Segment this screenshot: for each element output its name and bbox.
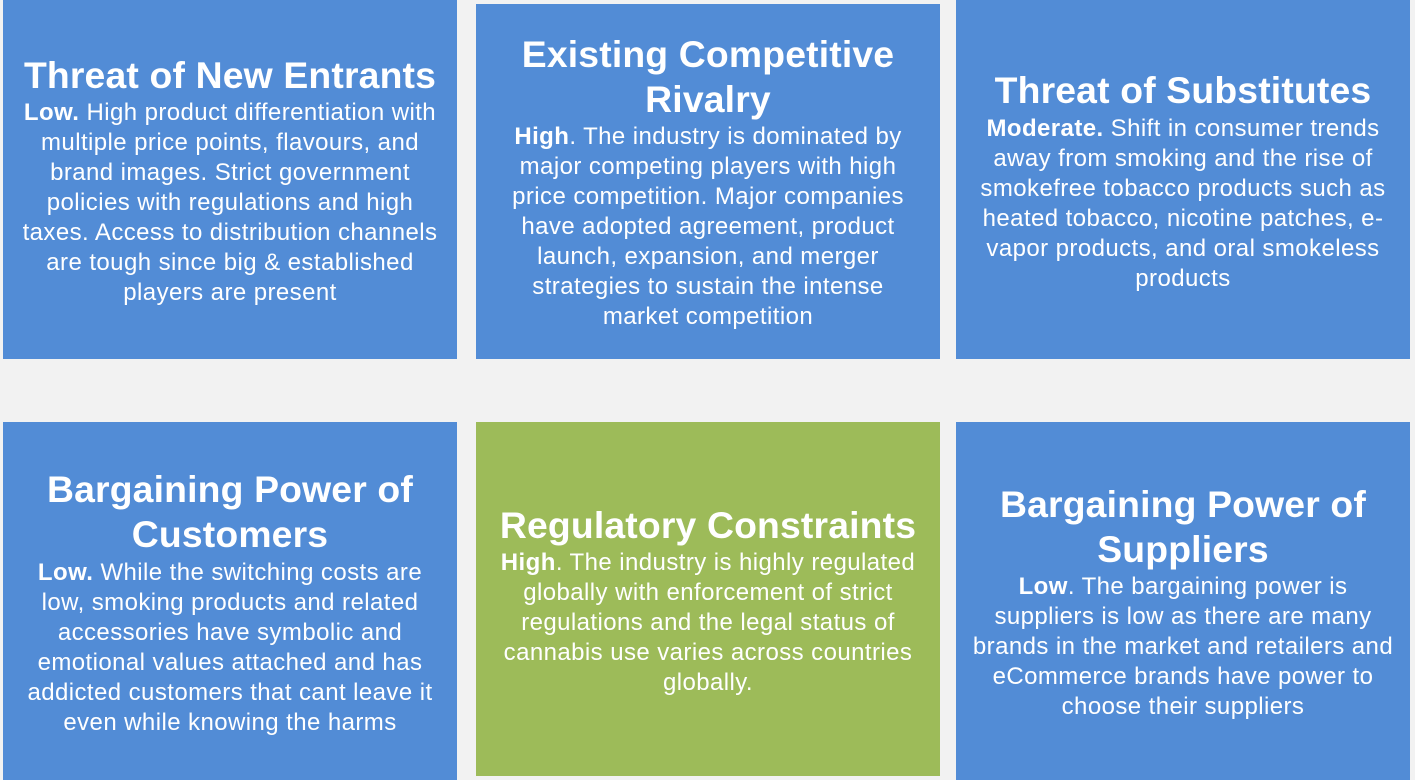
- text block: threat of substitutes: [980, 115, 1386, 292]
- text block: existing competitive rivalry: launch, expansion, and merger: [537, 243, 879, 270]
- heading: bargaining power of suppliers: Bargaining Power of: [1000, 483, 1366, 525]
- panel: regulatory constraints: [476, 422, 940, 776]
- text block: regulatory constraints: globally with enforcement of strict: [523, 579, 893, 606]
- panel: bargaining power of customers: [3, 422, 457, 780]
- text block: existing competitive rivalry: major competing players with high: [520, 153, 896, 180]
- heading: bargaining power of suppliers: [1000, 483, 1366, 570]
- text block: threat of substitutes: vapor products, and oral smokeless: [986, 235, 1380, 262]
- text block: threat of substitutes: heated tobacco, nicotine patches, e-: [983, 205, 1383, 232]
- text block: bargaining power of customers: low, smoking products and related: [42, 589, 418, 616]
- heading: threat of new entrants: Threat of New Entrants: [24, 54, 436, 96]
- heading: existing competitive rivalry: Existing Competitive: [522, 33, 894, 75]
- text block: existing competitive rivalry: price competition. Major companies: [512, 183, 904, 210]
- text block: threat of substitutes: products: [1135, 265, 1231, 292]
- panel: existing competitive rivalry: [476, 4, 940, 359]
- text block: bargaining power of suppliers: Low. The bargaining power is: [1019, 573, 1347, 600]
- text block: regulatory constraints: cannabis use varies across countries: [504, 639, 912, 666]
- text block: bargaining power of suppliers: suppliers is low as there are many: [994, 603, 1372, 630]
- text block: existing competitive rivalry: High. The industry is dominated by: [514, 123, 902, 150]
- text block: existing competitive rivalry: strategies to sustain the intense: [532, 273, 884, 300]
- text block: bargaining power of customers: even while knowing the harms: [63, 709, 397, 736]
- text block: threat of new entrants: Low. High product differentiation with: [24, 99, 436, 126]
- text block: threat of substitutes: Moderate. Shift in consumer trends: [986, 115, 1380, 142]
- text block: threat of new entrants: brand images. Strict government: [50, 159, 410, 186]
- heading: regulatory constraints: Regulatory Constraints: [500, 504, 916, 546]
- text block: existing competitive rivalry: market competition: [603, 303, 813, 330]
- panel: threat of new entrants: [3, 0, 457, 359]
- text block: threat of new entrants: taxes. Access to distribution channels: [23, 219, 437, 246]
- text block: regulatory constraints: globally.: [663, 669, 753, 696]
- heading: threat of substitutes: Threat of Substitutes: [995, 69, 1371, 111]
- heading: existing competitive rivalry: Rivalry: [645, 78, 771, 120]
- text block: bargaining power of customers: emotional values attached and has: [38, 649, 422, 676]
- panel: bargaining power of suppliers: [956, 422, 1410, 780]
- heading: bargaining power of customers: [47, 468, 413, 555]
- text block: threat of new entrants: are tough since big & established: [46, 249, 414, 276]
- text block: bargaining power of customers: Low. While the switching costs are: [38, 559, 422, 586]
- heading: existing competitive rivalry: [522, 33, 894, 120]
- text block: threat of new entrants: players are present: [123, 279, 337, 306]
- text block: bargaining power of suppliers: brands in the market and retailers and: [973, 633, 1393, 660]
- panel: threat of substitutes: [956, 0, 1410, 359]
- text block: regulatory constraints: High. The industry is highly regulated: [501, 549, 915, 576]
- text block: bargaining power of customers: addicted customers that cant leave it: [27, 679, 433, 706]
- text block: bargaining power of customers: accessories have symbolic and: [58, 619, 402, 646]
- text block: existing competitive rivalry: [512, 123, 904, 330]
- text block: bargaining power of suppliers: eCommerce brands have power to: [993, 663, 1373, 690]
- text block: regulatory constraints: [501, 549, 915, 696]
- text block: existing competitive rivalry: have adopted agreement, product: [521, 213, 895, 240]
- text block: bargaining power of suppliers: choose their suppliers: [1062, 693, 1304, 720]
- text block: threat of new entrants: policies with regulations and high: [47, 189, 413, 216]
- text block: bargaining power of customers: [27, 559, 433, 736]
- text block: threat of substitutes: smokefree tobacco products such as: [980, 175, 1386, 202]
- text block: threat of new entrants: [23, 99, 437, 306]
- text block: bargaining power of suppliers: [973, 573, 1393, 720]
- text block: threat of substitutes: away from smoking and the rise of: [993, 145, 1373, 172]
- heading: bargaining power of suppliers: Suppliers: [1097, 528, 1269, 570]
- text block: regulatory constraints: regulations and the legal status of: [521, 609, 895, 636]
- text block: threat of new entrants: multiple price points, flavours, and: [41, 129, 419, 156]
- heading: bargaining power of customers: Bargaining Power of: [47, 468, 413, 510]
- heading: bargaining power of customers: Customers: [132, 513, 328, 555]
